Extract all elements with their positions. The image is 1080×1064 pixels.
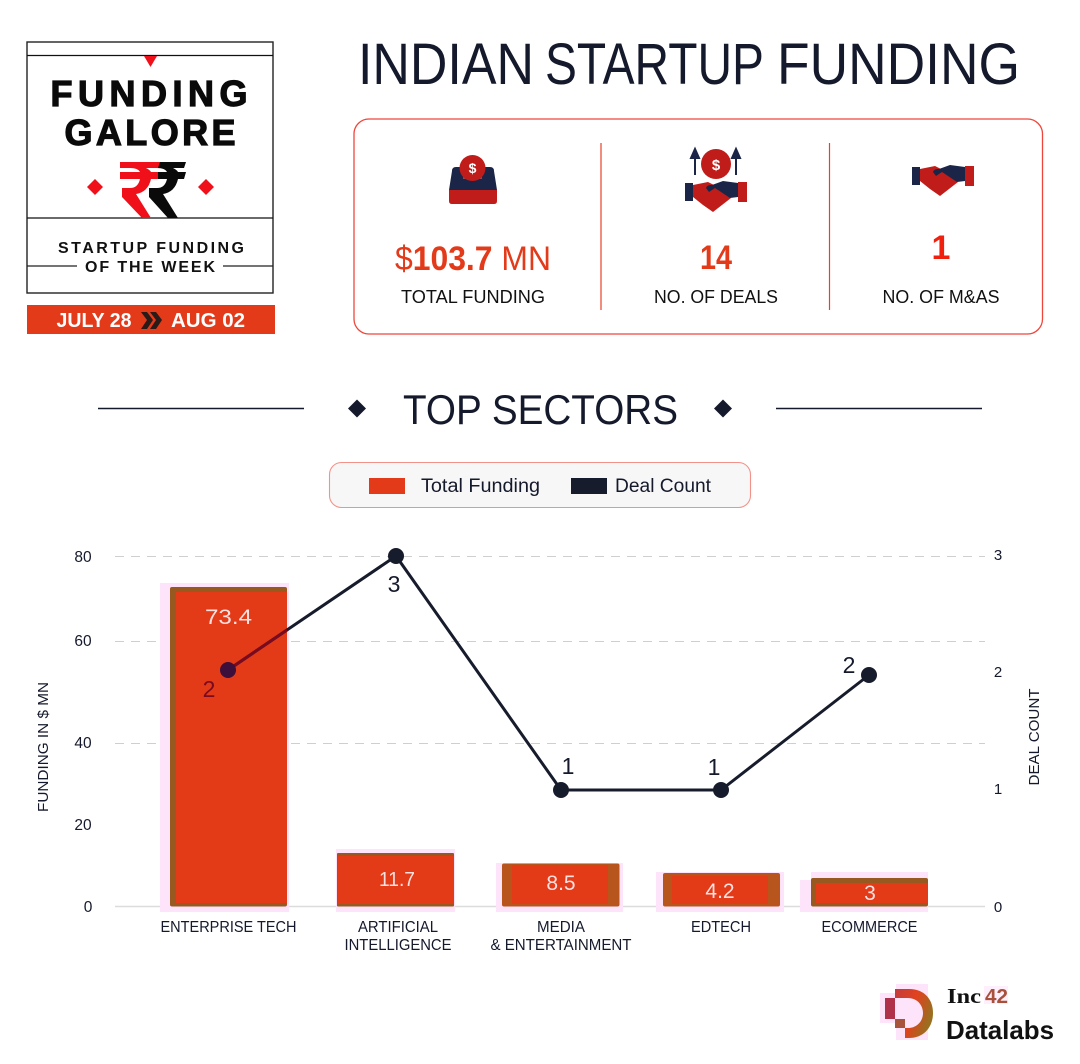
icon: handshake with coin and arrows: $ xyxy=(712,157,721,174)
left axis labels: 0 xyxy=(84,899,93,916)
panel: summary statistics xyxy=(354,119,1042,334)
subtitle: startup funding of the week xyxy=(27,240,273,276)
bar: ecommerce xyxy=(800,872,928,912)
right axis labels: 1 xyxy=(994,781,1002,798)
subtitle: startup funding of the week: OF THE WEEK xyxy=(85,259,215,276)
subtitle: startup funding of the week: STARTUP FUNDING xyxy=(58,240,244,257)
right axis title: DEAL COUNT xyxy=(1027,688,1043,785)
icon: datalabs d mark xyxy=(880,984,933,1040)
chart legend: Total Funding xyxy=(421,476,540,497)
stat: total funding xyxy=(395,240,551,307)
bar: media and entertainment xyxy=(496,863,623,912)
stat: number of deals: NO. OF DEALS xyxy=(654,287,778,307)
chart legend xyxy=(330,462,750,508)
category labels: EDTECH xyxy=(691,919,751,936)
stat: number of deals xyxy=(654,239,778,307)
stat: number of m&as: NO. OF M&AS xyxy=(882,287,1000,307)
stat: number of m&as: 1 xyxy=(932,229,950,267)
left axis labels: 80 xyxy=(74,549,92,566)
chart legend: Deal Count xyxy=(615,476,712,497)
bar: enterprise tech xyxy=(160,583,289,912)
heading: funding galore: GALORE xyxy=(64,112,236,153)
icon: handshake with coin and arrows xyxy=(685,149,747,212)
bar: enterprise tech: 73.4 xyxy=(205,606,252,629)
combo chart: funding and deal count by sector xyxy=(36,547,1043,954)
icon: double chevron xyxy=(141,312,162,329)
icon: rupee symbols xyxy=(87,162,214,218)
line: deal count: 2 xyxy=(843,652,855,678)
logo panel: funding galore xyxy=(27,42,273,293)
title xyxy=(358,32,1020,97)
stat: total funding: TOTAL FUNDING xyxy=(401,287,545,307)
stat: total funding: $103.7 MN xyxy=(395,240,551,278)
wordmark: inc42: Inc xyxy=(947,984,981,1008)
heading: top sectors xyxy=(98,386,982,433)
category labels: & ENTERTAINMENT xyxy=(490,937,632,954)
bar: artificial intelligence: 11.7 xyxy=(379,869,415,891)
category labels xyxy=(160,919,918,954)
date banner xyxy=(27,305,275,334)
line: deal count xyxy=(203,548,877,798)
icon: coin in box: $ xyxy=(469,160,477,176)
bar: media and entertainment: 8.5 xyxy=(546,872,576,895)
wordmark: inc42: 42 xyxy=(985,986,1008,1008)
bar: ecommerce: 3 xyxy=(864,882,876,905)
stat: number of deals: 14 xyxy=(700,239,732,277)
title: INDIAN xyxy=(358,32,534,97)
bar: edtech: 4.2 xyxy=(705,880,735,903)
brand logo: inc42 datalabs xyxy=(880,984,1054,1045)
left axis labels: 20 xyxy=(74,817,92,834)
line: deal count: 1 xyxy=(562,753,574,779)
line: deal count: 2 xyxy=(203,676,215,702)
line: deal count: 1 xyxy=(708,754,720,780)
date banner: AUG 02 xyxy=(171,310,245,332)
category labels: MEDIA xyxy=(537,919,586,936)
icon: coin in box xyxy=(449,155,497,204)
wordmark: datalabs: Datalabs xyxy=(946,1015,1054,1045)
category labels: ENTERPRISE TECH xyxy=(160,919,296,936)
left axis labels xyxy=(74,549,93,916)
category labels: ARTIFICIAL xyxy=(358,919,438,936)
stat: number of m&as xyxy=(882,229,1000,307)
bar: artificial intelligence xyxy=(336,849,455,912)
icon: handshake xyxy=(912,165,974,196)
heading: funding galore xyxy=(50,73,248,153)
heading: funding galore: FUNDING xyxy=(50,73,248,114)
right axis labels: 2 xyxy=(994,664,1002,681)
category labels: INTELLIGENCE xyxy=(344,937,452,954)
right axis labels: 0 xyxy=(994,899,1002,916)
title: STARTUP xyxy=(545,32,764,97)
right axis labels: 3 xyxy=(994,547,1002,564)
left axis labels: 60 xyxy=(74,633,92,650)
heading: top sectors: TOP SECTORS xyxy=(403,386,678,433)
gridlines xyxy=(115,556,985,744)
date banner: JULY 28 xyxy=(56,310,132,332)
wordmark: inc42 xyxy=(947,984,1008,1008)
left axis title: FUNDING IN $ MN xyxy=(36,682,52,812)
title: FUNDING xyxy=(777,32,1020,97)
right axis labels xyxy=(994,547,1002,916)
line: deal count: 3 xyxy=(388,571,400,597)
category labels: ECOMMERCE xyxy=(822,919,918,936)
bar: edtech xyxy=(656,872,784,912)
left axis labels: 40 xyxy=(74,735,92,752)
